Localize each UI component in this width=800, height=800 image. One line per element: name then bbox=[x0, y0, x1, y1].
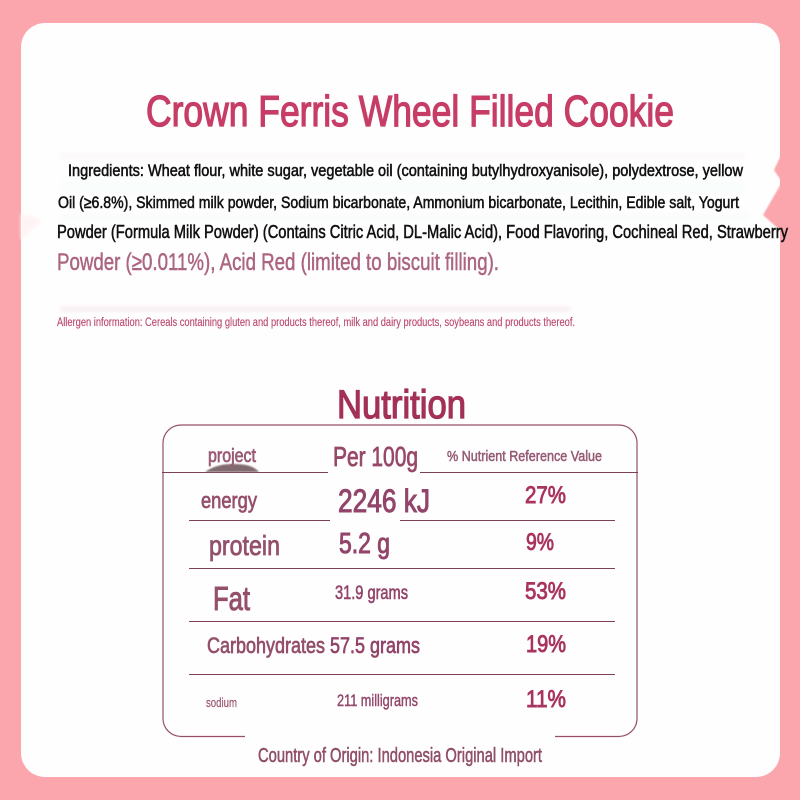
row: carbohydrates: Carbohydrates bbox=[207, 633, 325, 658]
row: carbohydrates bbox=[207, 631, 566, 658]
row: energy: 27% bbox=[525, 482, 566, 509]
title: Crown Ferris Wheel Filled Cookie bbox=[146, 87, 674, 136]
row: energy bbox=[201, 482, 566, 519]
header row bbox=[208, 441, 602, 472]
row: carbohydrates: 19% bbox=[526, 631, 566, 658]
row: protein bbox=[209, 528, 554, 561]
row: protein: protein bbox=[209, 530, 280, 561]
row: fat: 53% bbox=[525, 578, 566, 605]
row: sodium: 211 milligrams bbox=[337, 691, 418, 710]
row: sodium bbox=[206, 686, 566, 713]
text block: ingredients last line: Powder (≥0.011%), Acid Red (limited to biscuit filling). bbox=[57, 249, 499, 276]
text block: ingredients bbox=[57, 162, 788, 242]
text block: country of origin: Country of Origin: Indonesia Original Import bbox=[258, 745, 542, 767]
row: fat: Fat bbox=[213, 580, 250, 617]
row: carbohydrates: 57.5 grams bbox=[330, 633, 420, 658]
row: protein: 5.2 g bbox=[339, 528, 390, 560]
row: sodium: sodium bbox=[206, 696, 237, 710]
row: protein: 9% bbox=[526, 529, 554, 556]
table dividers bbox=[162, 472, 638, 674]
text block: allergen information: Allergen information: Cereals containing gluten and products thereof, milk and dairy products, soybeans and products thereof. bbox=[57, 317, 575, 329]
heading: nutrition: Nutrition bbox=[337, 383, 466, 427]
row: fat: 31.9 grams bbox=[335, 583, 408, 604]
header row: project bbox=[208, 446, 257, 467]
row: energy: 2246 kJ bbox=[338, 483, 430, 519]
row: fat bbox=[213, 578, 566, 617]
row: energy: energy bbox=[201, 488, 257, 513]
table frame bbox=[163, 425, 637, 736]
smudge under project bbox=[205, 464, 259, 472]
row: sodium: 11% bbox=[526, 686, 566, 713]
panel: nutrition table bbox=[162, 425, 638, 736]
header row: % Nutrient Reference Value bbox=[447, 449, 602, 465]
header row: Per 100g bbox=[333, 441, 418, 472]
